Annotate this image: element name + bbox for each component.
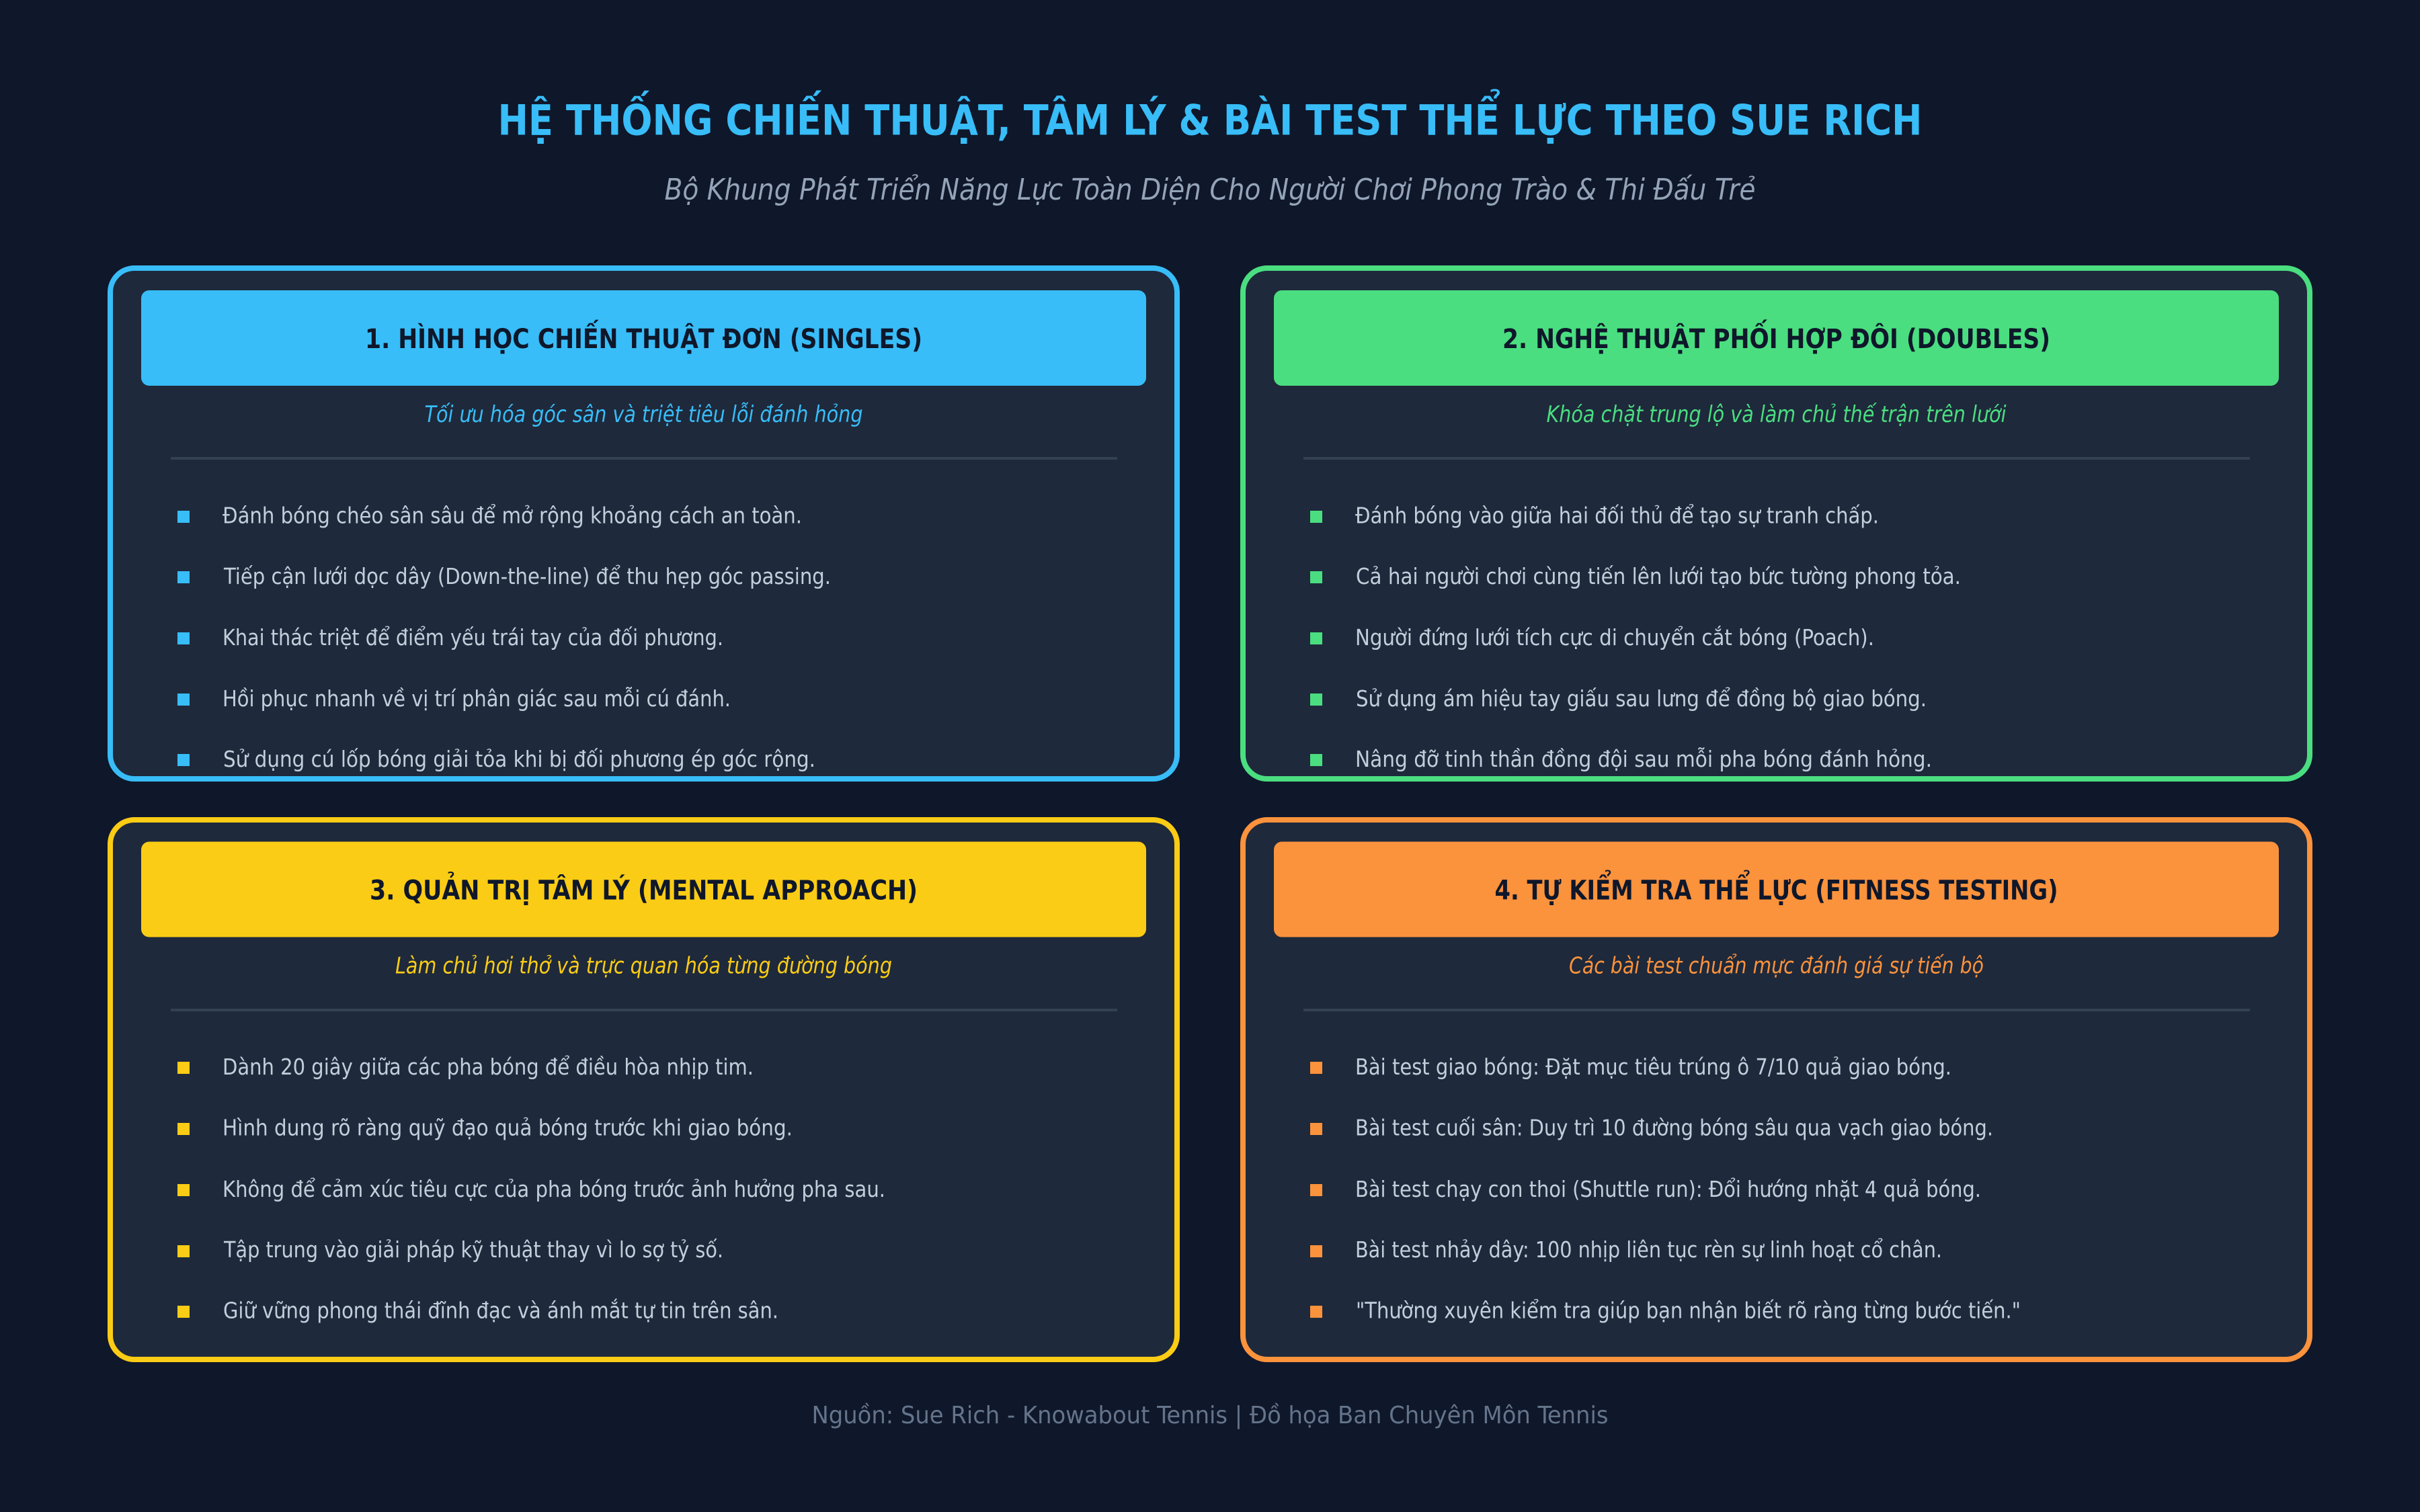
list: singles — [177, 503, 831, 772]
panel: doubles — [1243, 268, 2310, 779]
footer: Nguồn: Sue Rich - Knowabout Tennis | Đồ họa Ban Chuyên Môn Tennis — [812, 1402, 1608, 1429]
list: fitness testing — [1310, 1054, 2021, 1324]
panel subtitle: mental approach: Làm chủ hơi thở và trực quan hóa từng đường bóng — [395, 953, 892, 980]
list item: Cả hai người chơi cùng tiến lên lưới tạo bức tường phong tỏa. — [1356, 563, 1961, 589]
list item: Bài test giao bóng: Đặt mục tiêu trúng ô 7/10 quả giao bóng. — [1355, 1054, 1951, 1080]
panel header: doubles: 2. NGHỆ THUẬT PHỐI HỢP ĐÔI (DOUBLES) — [1502, 319, 2050, 355]
panel: singles — [110, 268, 1177, 779]
panel subtitle: fitness testing: Các bài test chuẩn mực đánh giá sự tiến bộ — [1569, 953, 1984, 980]
panel: fitness testing — [1243, 820, 2310, 1359]
title: HỆ THỐNG CHIẾN THUẬT, TÂM LÝ & BÀI TEST THỂ LỰC THEO SUE RICH — [497, 89, 1923, 145]
list item: Hình dung rõ ràng quỹ đạo quả bóng trước khi giao bóng. — [223, 1114, 793, 1141]
panel header: mental approach — [141, 841, 1146, 937]
subtitle: Bộ Khung Phát Triển Năng Lực Toàn Diện Cho Người Chơi Phong Trào & Thi Đấu Trẻ — [664, 173, 1756, 207]
list item: Dành 20 giây giữa các pha bóng để điều hòa nhịp tim. — [223, 1054, 754, 1080]
list item: "Thường xuyên kiểm tra giúp bạn nhận biết rõ ràng từng bước tiến." — [1356, 1297, 2021, 1324]
list item: Hồi phục nhanh về vị trí phân giác sau mỗi cú đánh. — [223, 685, 731, 712]
list item: Tập trung vào giải pháp kỹ thuật thay vì lo sợ tỷ số. — [223, 1236, 723, 1263]
list: doubles — [1310, 503, 1961, 772]
panel header: doubles — [1274, 290, 2279, 386]
list item: Bài test chạy con thoi (Shuttle run): Đổi hướng nhặt 4 quả bóng. — [1355, 1176, 1981, 1202]
panel: mental approach — [110, 820, 1177, 1359]
list item: Không để cảm xúc tiêu cực của pha bóng trước ảnh hưởng pha sau. — [223, 1176, 885, 1202]
panel header: mental approach: 3. QUẢN TRỊ TÂM LÝ (MENTAL APPROACH) — [370, 871, 918, 906]
list item: Sử dụng ám hiệu tay giấu sau lưng để đồng bộ giao bóng. — [1356, 685, 1927, 712]
panel header: fitness testing: 4. TỰ KIỂM TRA THỂ LỰC (FITNESS TESTING) — [1495, 870, 2058, 906]
panel subtitle: doubles: Khóa chặt trung lộ và làm chủ thế trận trên lưới — [1546, 401, 2007, 428]
list item: Tiếp cận lưới dọc dây (Down-the-line) để thu hẹp góc passing. — [223, 563, 831, 589]
panel header: singles: 1. HÌNH HỌC CHIẾN THUẬT ĐƠN (SINGLES) — [365, 319, 922, 355]
panel subtitle: singles: Tối ưu hóa góc sân và triệt tiêu lỗi đánh hỏng — [425, 401, 863, 428]
list item: Đánh bóng vào giữa hai đối thủ để tạo sự tranh chấp. — [1355, 503, 1879, 528]
panel header: singles — [141, 290, 1146, 386]
list item: Giữ vững phong thái đĩnh đạc và ánh mắt tự tin trên sân. — [223, 1297, 778, 1324]
list item: Nâng đỡ tinh thần đồng đội sau mỗi pha bóng đánh hỏng. — [1355, 746, 1932, 772]
list: mental approach — [177, 1054, 885, 1324]
list item: Bài test cuối sân: Duy trì 10 đường bóng sâu qua vạch giao bóng. — [1355, 1114, 1993, 1141]
list item: Đánh bóng chéo sân sâu để mở rộng khoảng cách an toàn. — [223, 503, 802, 528]
list item: Người đứng lưới tích cực di chuyển cắt bóng (Poach). — [1355, 624, 1874, 650]
list item: Khai thác triệt để điểm yếu trái tay của đối phương. — [223, 624, 723, 650]
list item: Sử dụng cú lốp bóng giải tỏa khi bị đối phương ép góc rộng. — [223, 746, 815, 772]
panel header: fitness testing — [1274, 841, 2279, 937]
list item: Bài test nhảy dây: 100 nhịp liên tục rèn sự linh hoạt cổ chân. — [1355, 1236, 1942, 1263]
